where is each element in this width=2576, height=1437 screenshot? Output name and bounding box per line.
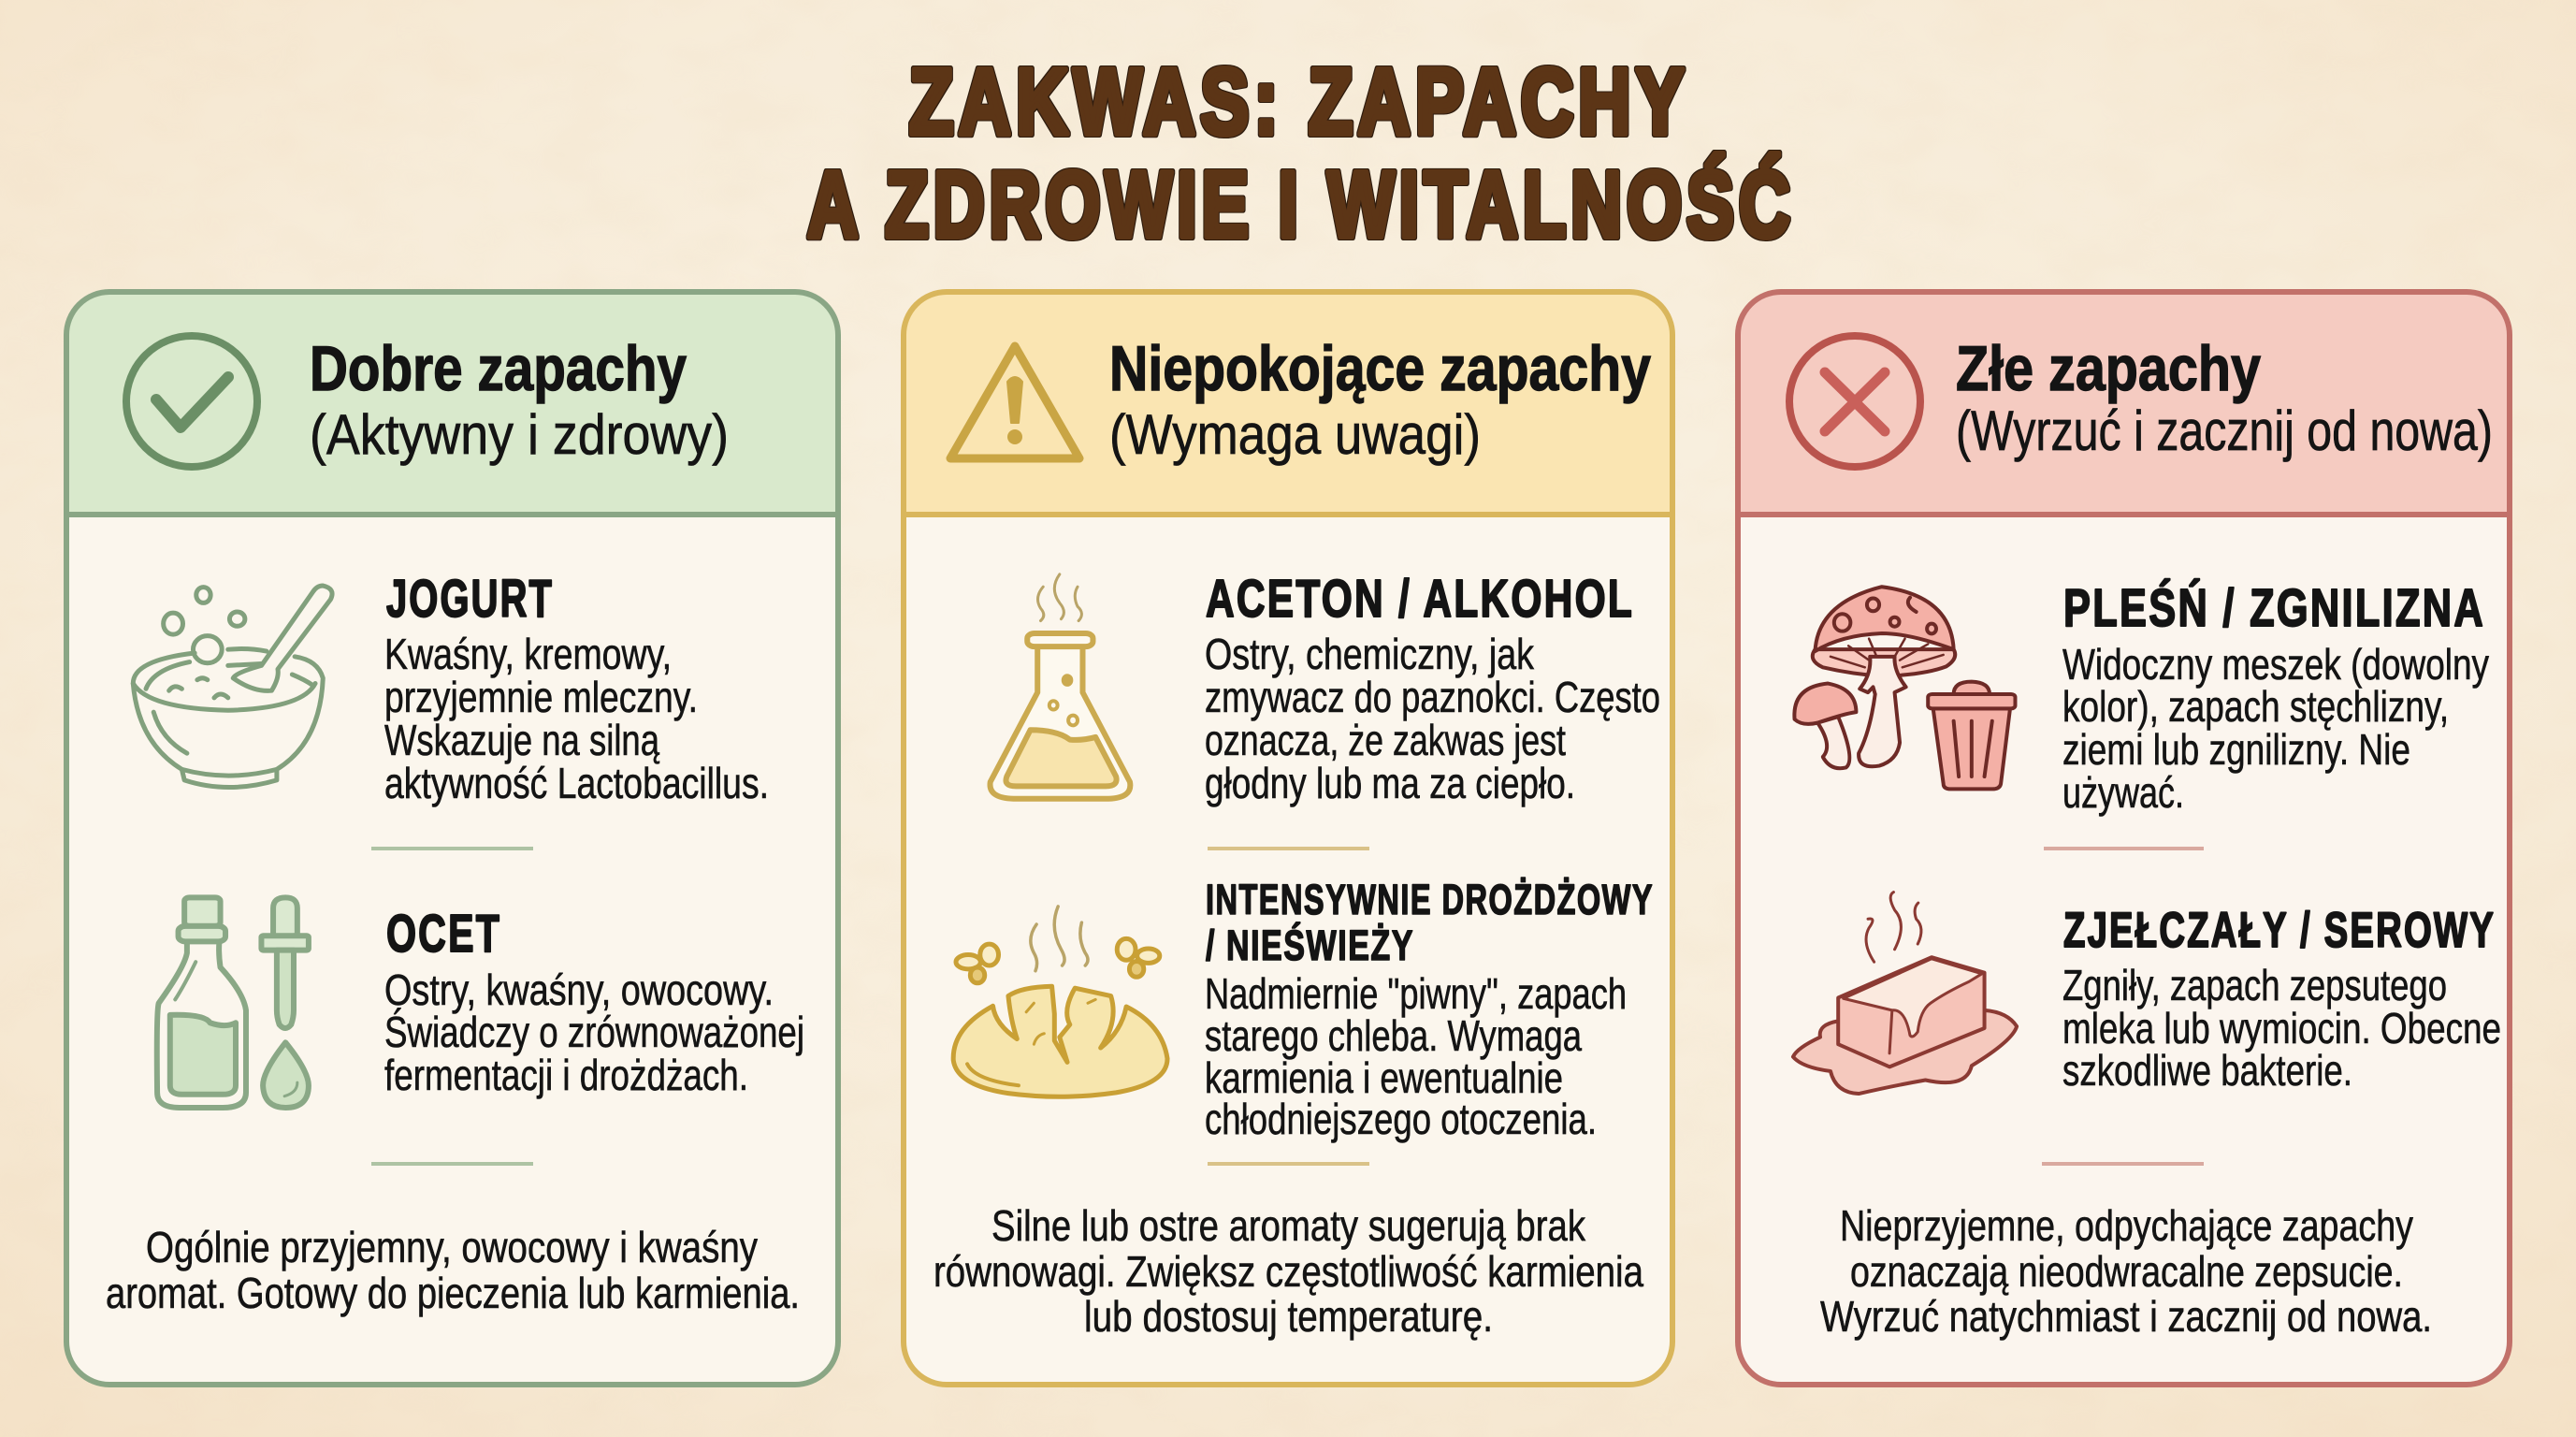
item: aceton / alkohol: ACETON / ALKOHOL (1206, 569, 1634, 629)
panel: niepokojące zapachy (904, 292, 1672, 1385)
summary: złe zapachy: Wyrzuć natychmiast i zacznij od nowa. (1820, 1292, 2432, 1341)
item: pleśń / zgnilizna: ziemi lub zgnilizny. Nie (2062, 725, 2410, 774)
item: jogurt: Wskazuje na silną (384, 716, 659, 764)
title: A ZDROWIE I WITALNOŚĆ (807, 152, 1795, 257)
icon: melted rancid butter (1793, 893, 2017, 1094)
panel: dobre zapachy (66, 292, 838, 1385)
icon: cracked bread with steam and flies (953, 907, 1167, 1096)
panel border (904, 292, 1672, 1385)
item: pleśń / zgnilizna: kolor), zapach stęchlizny, (2062, 682, 2449, 731)
item: intensywnie drożdżowy / nieświeży: Nadmiernie "piwny", zapach (1205, 969, 1627, 1018)
panel body (904, 292, 1672, 1385)
heading: dobre zapachy: Dobre zapachy (310, 333, 687, 404)
item: aceton / alkohol (1205, 569, 1660, 807)
icon: vinegar bottle and dropper (157, 897, 309, 1108)
item: ocet: OCET (386, 904, 501, 964)
heading: złe zapachy (1956, 333, 2493, 462)
heading: niepokojące zapachy: (Wymaga uwagi) (1109, 403, 1481, 466)
item: jogurt (384, 569, 769, 807)
summary: niepokojące zapachy: lub dostosuj temperaturę. (1084, 1292, 1493, 1341)
item: ocet: fermentacji i drożdżach. (384, 1051, 748, 1099)
icon: warning triangle (950, 346, 1079, 458)
item: jogurt: aktywność Lactobacillus. (384, 759, 769, 807)
item: aceton / alkohol: oznacza, że zakwas jest (1205, 716, 1566, 764)
summary: dobre zapachy (106, 1223, 800, 1317)
item: intensywnie drożdżowy / nieświeży (1205, 876, 1654, 1143)
item: aceton / alkohol: głodny lub ma za ciepło. (1205, 759, 1575, 807)
item: intensywnie drożdżowy / nieświeży: INTENSYWNIE DROŻDŻOWY (1206, 876, 1654, 923)
panel header band (1738, 292, 2510, 515)
icon: mushrooms and trash can (1794, 587, 2015, 789)
summary: złe zapachy (1820, 1201, 2432, 1341)
heading: niepokojące zapachy: Niepokojące zapachy (1109, 333, 1651, 404)
panel: złe zapachy (1738, 292, 2510, 1385)
summary: złe zapachy: Nieprzyjemne, odpychające zapachy (1840, 1201, 2413, 1250)
item: pleśń / zgnilizna (2062, 578, 2489, 817)
item: intensywnie drożdżowy / nieświeży: / NIEŚWIEŻY (1206, 922, 1414, 969)
icon: yogurt bowl (133, 586, 332, 788)
icon: flask with steam (990, 574, 1130, 799)
panel header band (904, 292, 1672, 515)
summary: niepokojące zapachy: równowagi. Zwiększ częstotliwość karmienia (933, 1247, 1643, 1296)
icon: cross circle (1789, 336, 1920, 467)
summary: niepokojące zapachy: Silne lub ostre aromaty sugerują brak (991, 1201, 1586, 1250)
heading: dobre zapachy: (Aktywny i zdrowy) (310, 403, 729, 466)
summary: niepokojące zapachy (933, 1201, 1643, 1341)
item: zjełczały / serowy (2062, 903, 2501, 1095)
item: jogurt: Kwaśny, kremowy, (384, 630, 672, 678)
item: intensywnie drożdżowy / nieświeży: karmienia i ewentualnie (1205, 1053, 1563, 1102)
title (807, 50, 1795, 257)
heading: złe zapachy: Złe zapachy (1956, 333, 2261, 404)
icon: check circle (126, 336, 257, 467)
item: zjełczały / serowy: szkodliwe bakterie. (2062, 1046, 2352, 1095)
summary: dobre zapachy: Ogólnie przyjemny, owocowy i kwaśny (146, 1223, 758, 1271)
panel header band (66, 292, 838, 515)
item: ocet: Świadczy o zrównoważonej (384, 1008, 804, 1056)
item: aceton / alkohol: zmywacz do paznokci. Często (1205, 673, 1660, 721)
panel border (1738, 292, 2510, 1385)
item: intensywnie drożdżowy / nieświeży: chłodniejszego otoczenia. (1205, 1095, 1597, 1143)
item: zjełczały / serowy: Zgniły, zapach zepsutego (2062, 961, 2447, 1009)
item: jogurt: przyjemnie mleczny. (384, 673, 698, 721)
panel body (1738, 292, 2510, 1385)
item: ocet (384, 904, 804, 1099)
item: aceton / alkohol: Ostry, chemiczny, jak (1205, 630, 1535, 678)
item: jogurt: JOGURT (386, 569, 554, 629)
summary: dobre zapachy: aromat. Gotowy do pieczenia lub karmienia. (106, 1269, 800, 1317)
heading: niepokojące zapachy (1109, 333, 1651, 466)
heading: dobre zapachy (310, 333, 729, 466)
title: ZAKWAS: ZAPACHY (909, 50, 1689, 154)
panel border (66, 292, 838, 1385)
panel body (66, 292, 838, 1385)
item: intensywnie drożdżowy / nieświeży: starego chleba. Wymaga (1205, 1011, 1582, 1060)
item: ocet: Ostry, kwaśny, owocowy. (384, 965, 774, 1014)
item: pleśń / zgnilizna: używać. (2062, 768, 2184, 817)
summary: złe zapachy: oznaczają nieodwracalne zepsucie. (1850, 1247, 2403, 1296)
